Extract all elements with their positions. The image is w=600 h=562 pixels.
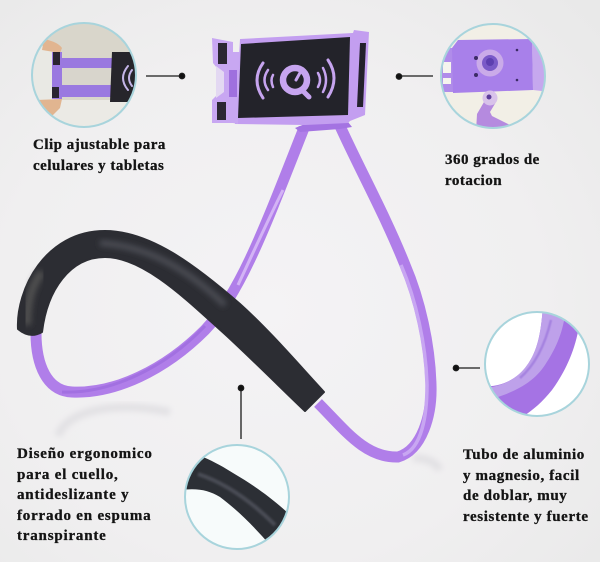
waves and logo <box>257 60 334 98</box>
text: rotation: 360 grados de <box>445 152 540 168</box>
right slot <box>357 43 366 107</box>
text: rotation <box>445 152 540 189</box>
screen <box>238 37 350 118</box>
tube reflection <box>58 407 440 470</box>
purple neck tube <box>36 126 431 457</box>
text: aluminum tube: y magnesio, facil <box>463 468 580 484</box>
left bracket <box>212 38 240 124</box>
text: clip <box>33 137 166 174</box>
inset: rotation <box>442 39 544 127</box>
inset: tube detail <box>486 313 588 415</box>
stem <box>295 122 352 132</box>
connector lines <box>146 73 480 439</box>
text: ergonomic design: Diseño ergonomico <box>17 446 153 462</box>
text: aluminum tube: de doblar, muy <box>463 488 567 504</box>
text: rotation: rotacion <box>445 173 502 189</box>
text: ergonomic design: antideslizante y <box>17 487 129 503</box>
text: ergonomic design: para el cuello, <box>17 467 119 483</box>
inset: foam detail <box>180 445 290 549</box>
text: aluminum tube: resistente y fuerte <box>463 509 589 525</box>
text: clip: celulares y tabletas <box>33 158 164 174</box>
text: ergonomic design: transpirante <box>17 528 107 544</box>
frame <box>235 30 369 125</box>
phone clip <box>212 30 369 132</box>
text: ergonomic design <box>16 446 153 544</box>
text: aluminum tube <box>463 447 589 525</box>
text: ergonomic design: forrado en espuma <box>17 508 151 524</box>
text: clip: Clip ajustable para <box>33 137 166 153</box>
inset: clip <box>33 24 135 126</box>
black foam grip <box>18 231 324 411</box>
text: aluminum tube: Tubo de aluminio <box>463 447 585 463</box>
